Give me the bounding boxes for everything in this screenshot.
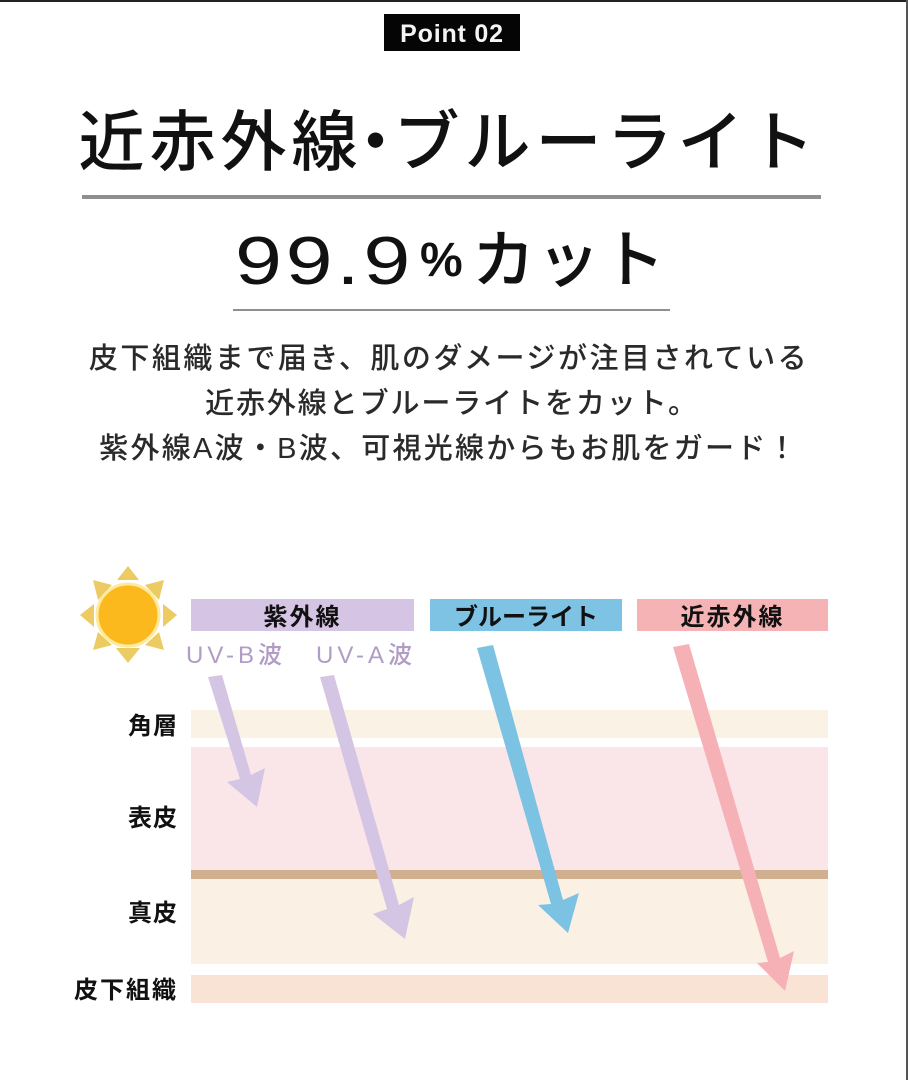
heading: 99.9% cut: 99.9 [235, 223, 414, 299]
heading: 99.9% cut [235, 223, 667, 299]
skin layer: stratum corneum [191, 710, 828, 738]
body text [89, 343, 809, 465]
legend: blue light: ブルーライト [454, 604, 598, 631]
body text: 紫外線A波・B波、可視光線からもお肌をガード！ [99, 433, 799, 465]
skin layer boundary band [191, 870, 828, 879]
skin layer: dermis [191, 879, 828, 964]
legend: ultraviolet [191, 599, 414, 631]
body text: 近赤外線とブルーライトをカット。 [205, 388, 699, 420]
badge: Point 02 [384, 14, 520, 51]
divider under title [82, 195, 821, 199]
layer label: stratum corneum: 角層 [128, 713, 178, 740]
divider under heading [233, 309, 670, 311]
heading: 99.9% cut: カット [472, 226, 667, 296]
legend: blue light [430, 599, 622, 631]
heading: 99.9% cut: % [420, 234, 463, 287]
body text: 皮下組織まで届き、肌のダメージが注目されている [89, 343, 809, 375]
legend: ultraviolet: 紫外線 [264, 604, 342, 631]
layer label: epidermis: 表皮 [128, 805, 178, 832]
title: near infrared and blue light: 近赤外線・ブルーライト [78, 105, 820, 179]
legend: near infrared: 近赤外線 [680, 604, 784, 631]
label: UV-A: UV-A波 [316, 642, 416, 669]
skin layer: epidermis [191, 747, 828, 870]
label: UV-B: UV-B波 [186, 642, 286, 669]
layer label: subcutaneous tissue: 皮下組織 [74, 977, 178, 1004]
legend: near infrared [637, 599, 828, 631]
layer label: dermis: 真皮 [128, 900, 178, 927]
skin layer: subcutaneous tissue [191, 975, 828, 1003]
badge: Point 02: Point 02 [400, 20, 504, 48]
